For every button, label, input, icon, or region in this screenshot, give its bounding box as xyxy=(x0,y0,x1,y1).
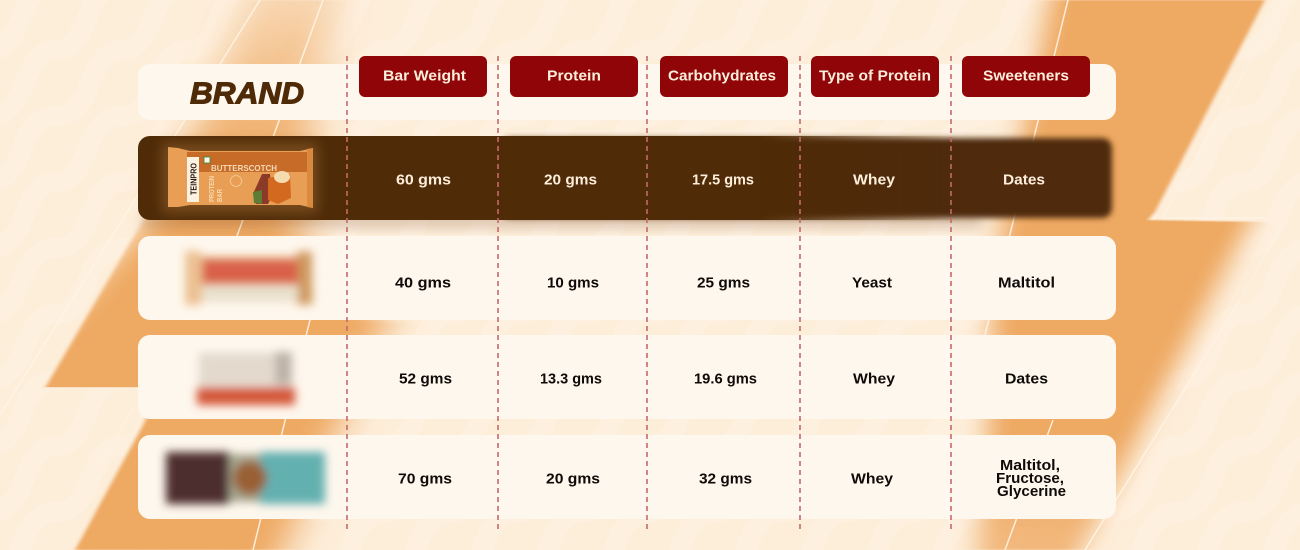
row 2 values: 40 gms xyxy=(395,274,451,292)
header: type of protein xyxy=(811,56,939,97)
header: bar weight xyxy=(359,56,487,97)
row 1 values: 20 gms xyxy=(544,172,597,188)
header: protein xyxy=(510,56,638,97)
row 4 values: 20 gms xyxy=(546,470,600,488)
row panel 2 xyxy=(138,236,1116,320)
row 1 values: Whey xyxy=(853,172,896,188)
product: blurred bar 2 xyxy=(185,251,313,305)
row 2 values: Maltitol xyxy=(998,274,1055,292)
row 3 values: 19.6 gms xyxy=(694,370,757,388)
row 1 values: 17.5 gms xyxy=(692,172,754,188)
row 4 values: 70 gms xyxy=(398,470,452,488)
row 3 values: 52 gms xyxy=(399,370,452,388)
row 4 values: Glycerine xyxy=(997,483,1066,500)
highlighted row panel xyxy=(138,136,1116,220)
table xyxy=(138,56,1116,530)
product: butterscotch protein bar xyxy=(162,143,318,213)
row 1 values xyxy=(396,172,1045,188)
header: protein: Protein xyxy=(547,68,601,84)
row 4 values: Fructose, xyxy=(996,470,1064,487)
product: blurred bar 4 xyxy=(166,452,325,504)
row 3 values: Whey xyxy=(853,370,896,388)
row 3 values: Dates xyxy=(1005,370,1048,388)
row 3 values xyxy=(399,370,1048,388)
row 3 values: 13.3 gms xyxy=(540,370,602,388)
header: carbohydrates: Carbohydrates xyxy=(668,68,776,84)
product: butterscotch protein bar: BAR xyxy=(217,189,224,202)
row panel 3 xyxy=(138,335,1116,419)
header: type of protein: Type of Protein xyxy=(819,68,931,84)
right lightning bolt xyxy=(978,0,1300,550)
header row panel xyxy=(138,64,1116,120)
row 4 values: 32 gms xyxy=(699,470,752,488)
product: butterscotch protein bar: BUTTERSCOTCH xyxy=(211,163,277,173)
product: blurred bar 3 xyxy=(197,352,295,405)
row panel 4 xyxy=(138,435,1116,519)
row 2 values: Yeast xyxy=(852,274,892,292)
header pills xyxy=(359,56,1090,97)
header: carbohydrates xyxy=(660,56,788,97)
row 4 values: Whey xyxy=(851,470,894,488)
row 1 values: Dates xyxy=(1003,172,1045,188)
header: sweeteners xyxy=(962,56,1090,97)
row 4 values xyxy=(398,457,1066,500)
header: sweeteners: Sweeteners xyxy=(983,68,1069,84)
product: butterscotch protein bar: TEINPRO xyxy=(190,163,198,195)
row shadow xyxy=(142,214,982,227)
row 2 values: 25 gms xyxy=(697,274,750,292)
product: butterscotch protein bar: PROTEIN xyxy=(209,176,216,202)
column dividers xyxy=(347,56,951,530)
row 4 values: Maltitol, xyxy=(1000,457,1060,474)
left lightning bolt xyxy=(0,0,385,550)
row 2 values: 10 gms xyxy=(547,274,599,292)
row 2 values xyxy=(395,274,1055,292)
row 1 values: 60 gms xyxy=(396,172,451,188)
brand heading: BRAND xyxy=(190,76,304,110)
header: bar weight: Bar Weight xyxy=(383,68,466,84)
